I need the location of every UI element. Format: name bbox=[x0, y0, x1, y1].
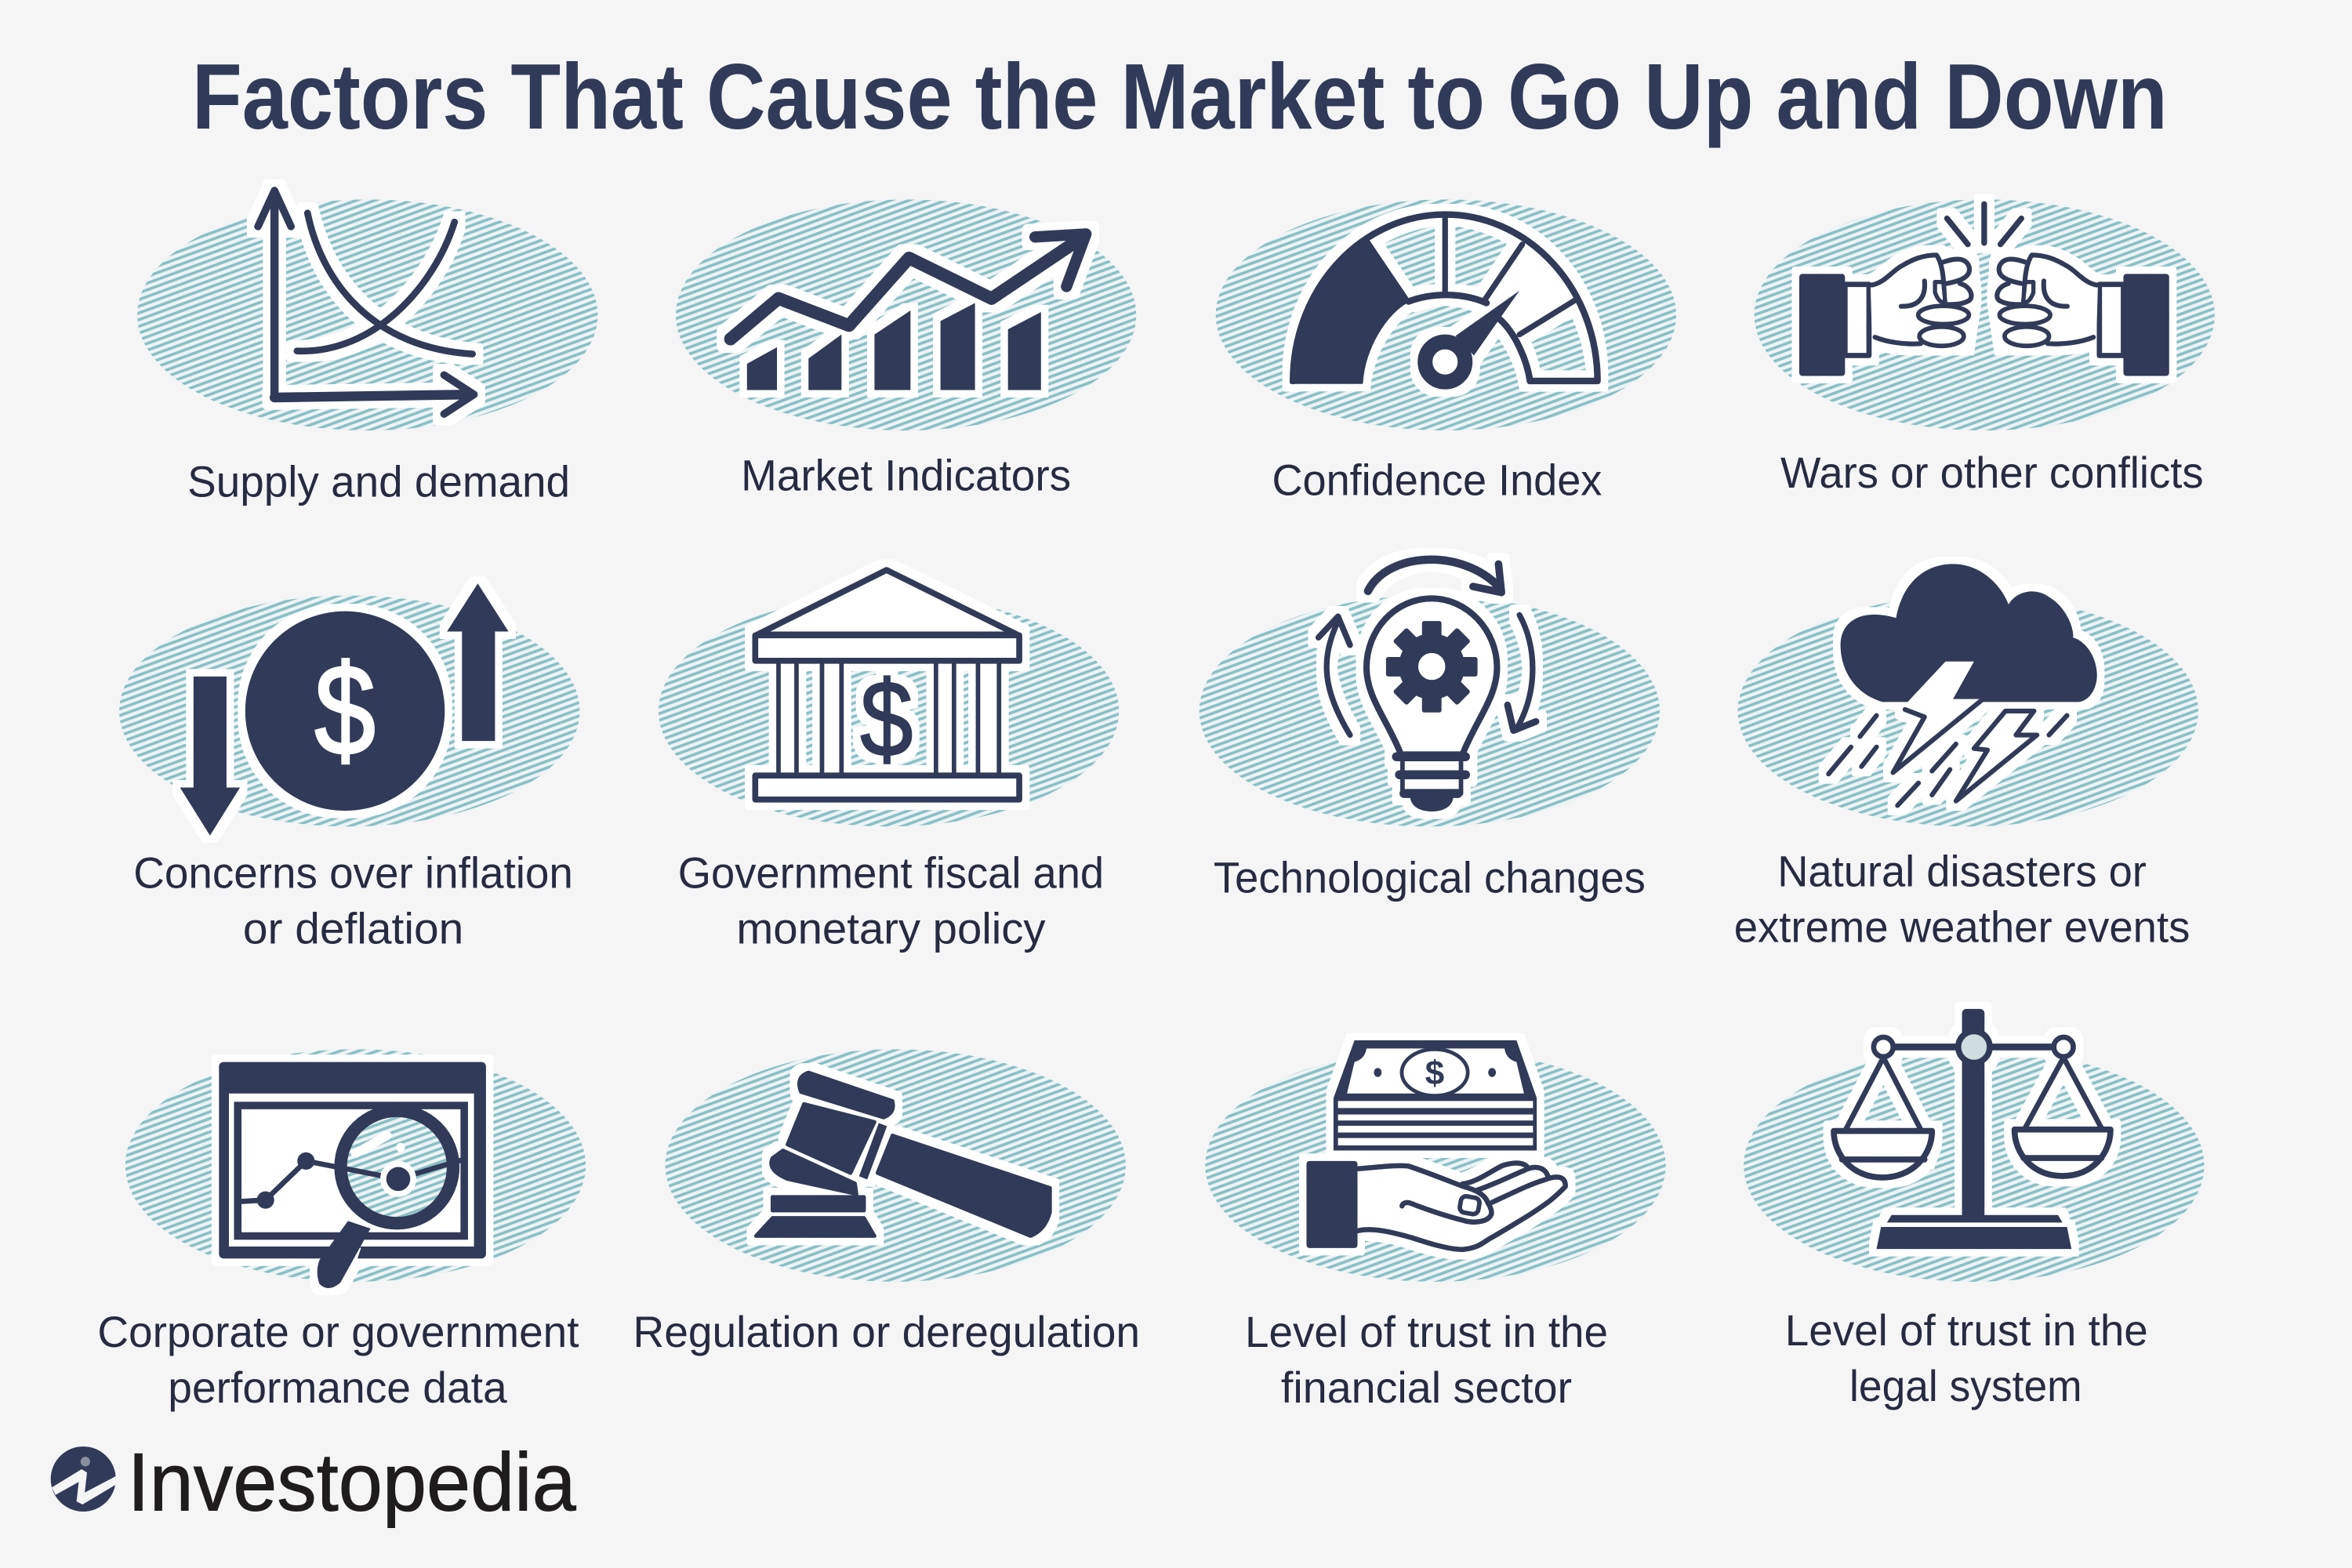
hatched ellipse bbox=[1200, 596, 1660, 826]
hatched ellipse bbox=[676, 199, 1136, 430]
label: Market Indicators bbox=[741, 452, 1071, 500]
label: Government fiscal and bbox=[678, 849, 1104, 898]
label bbox=[133, 849, 573, 953]
hatched ellipse bbox=[666, 1049, 1126, 1282]
panel: supply and demand bbox=[137, 191, 597, 506]
panel: market indicators bbox=[676, 199, 1136, 500]
label: Supply and demand bbox=[187, 457, 570, 506]
label bbox=[97, 1308, 579, 1412]
icon: bank: $ bbox=[860, 659, 913, 779]
open hand bbox=[1306, 1161, 1566, 1250]
wordmark: Investopedia bbox=[128, 1437, 576, 1529]
icon: gauge bbox=[1291, 215, 1598, 383]
label: Regulation or deregulation bbox=[633, 1308, 1140, 1356]
hatched ellipse bbox=[125, 1049, 586, 1282]
icon: bank bbox=[755, 570, 1019, 800]
panel: performance data bbox=[97, 1049, 586, 1412]
label bbox=[1734, 848, 2190, 952]
right fist bbox=[1994, 255, 2169, 376]
icon: storm cloud bbox=[1828, 564, 2097, 805]
cash stack bbox=[1334, 1040, 1537, 1150]
cash stack: $ bbox=[1425, 1054, 1444, 1092]
label bbox=[1245, 1308, 1608, 1412]
hatched ellipse bbox=[119, 596, 579, 826]
panel: government fiscal and monetary policy bbox=[659, 570, 1119, 953]
label: Level of trust in the bbox=[1785, 1306, 2148, 1355]
icon: fists bbox=[1799, 204, 2169, 376]
label: Confidence Index bbox=[1272, 456, 1602, 504]
panel: wars or other conflicts bbox=[1755, 199, 2215, 497]
label: Technological changes bbox=[1214, 853, 1646, 902]
label: Concerns over inflation bbox=[133, 849, 573, 898]
hatched ellipse bbox=[1755, 199, 2215, 430]
sparks bbox=[1947, 204, 2021, 245]
label: monetary policy bbox=[736, 904, 1046, 953]
panel: regulation bbox=[633, 1049, 1140, 1356]
icon: gavel bbox=[756, 1073, 1050, 1236]
label: financial sector bbox=[1281, 1363, 1572, 1412]
panel: natural disasters bbox=[1734, 564, 2198, 952]
hatched ellipse bbox=[659, 596, 1119, 826]
icon: money over open hand bbox=[1306, 1040, 1566, 1250]
panel: confidence index bbox=[1216, 199, 1676, 504]
icon: supply and demand curves bbox=[258, 191, 474, 414]
label: performance data bbox=[168, 1363, 507, 1412]
panel: inflation or deflation bbox=[119, 583, 579, 953]
logo mark bbox=[51, 1446, 116, 1512]
icon: window with magnifier bbox=[219, 1062, 486, 1288]
hatched ellipse bbox=[1216, 199, 1676, 430]
icon: scales of justice bbox=[1834, 1009, 2111, 1249]
label: Corporate or government bbox=[97, 1308, 579, 1356]
label: extreme weather events bbox=[1734, 903, 2190, 952]
panel: trust in financial sector bbox=[1205, 1040, 1666, 1412]
rain bbox=[1828, 716, 2067, 805]
icon: coin with arrows bbox=[180, 583, 509, 836]
hatched ellipse bbox=[1738, 596, 2198, 826]
label: Level of trust in the bbox=[1245, 1308, 1608, 1356]
label bbox=[678, 849, 1104, 953]
panel: trust in legal system bbox=[1744, 1009, 2205, 1410]
logo: Investopedia bbox=[51, 1437, 576, 1529]
label: Wars or other conflicts bbox=[1780, 448, 2204, 497]
icon: light bulb with gear bbox=[1319, 560, 1536, 811]
panel: technological changes bbox=[1200, 560, 1660, 902]
label: legal system bbox=[1849, 1362, 2082, 1410]
label: Natural disasters or bbox=[1777, 848, 2147, 896]
left fist bbox=[1799, 255, 1974, 376]
gear bbox=[1386, 621, 1478, 713]
icon: coin with arrows: $ bbox=[314, 639, 376, 782]
hatched ellipse bbox=[1744, 1049, 2205, 1282]
hatched ellipse bbox=[137, 199, 597, 430]
label bbox=[1785, 1306, 2148, 1410]
hatched ellipse bbox=[1205, 1049, 1666, 1282]
label: or deflation bbox=[243, 904, 463, 953]
icon: rising chart bbox=[731, 234, 1086, 390]
